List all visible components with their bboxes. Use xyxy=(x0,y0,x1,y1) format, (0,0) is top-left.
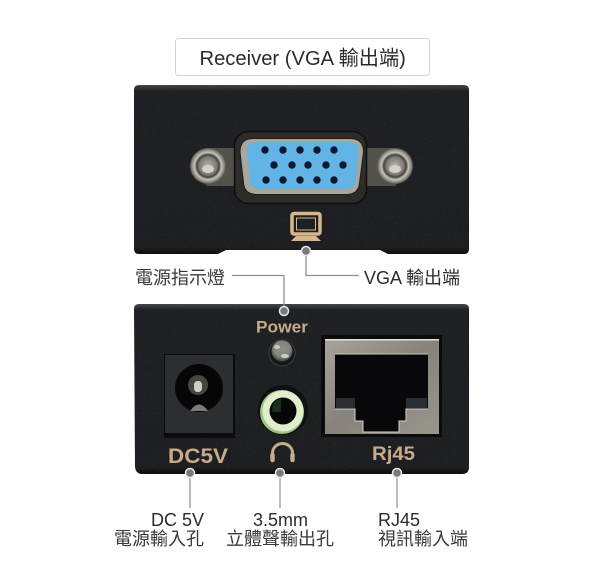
RJ45 label: 視訊輸入端 xyxy=(378,529,468,549)
Rj45 label: Rj45 xyxy=(372,444,415,465)
icon: headphones xyxy=(272,444,292,460)
power indicator label: 電源指示燈 xyxy=(135,268,225,288)
DC power jack xyxy=(164,354,235,438)
3.5mm audio jack xyxy=(258,385,308,435)
right screw xyxy=(377,148,413,184)
power LED xyxy=(269,340,295,366)
title box xyxy=(176,38,430,76)
panel: VGA receiver device photo xyxy=(134,85,469,254)
left screw xyxy=(190,148,226,184)
3.5mm label xyxy=(226,510,334,549)
DC 5V label: 電源輸入孔 xyxy=(114,529,204,549)
DC5V label: DC5V xyxy=(168,444,229,468)
title box: Receiver (VGA 輸出端) xyxy=(200,47,406,70)
3.5mm label: 立體聲輸出孔 xyxy=(226,529,334,549)
RJ45 label: RJ45 xyxy=(378,510,420,530)
RJ45 label xyxy=(378,510,468,549)
callout: DC leader xyxy=(186,468,194,508)
callout: VGA output leader xyxy=(302,246,359,276)
VGA connector xyxy=(205,132,397,204)
DC 5V label xyxy=(114,510,204,549)
DC 5V label: DC 5V xyxy=(151,510,204,530)
callout: audio leader xyxy=(276,468,284,508)
callout: RJ45 leader xyxy=(392,468,402,508)
icon: monitor xyxy=(291,214,321,241)
panel: bottom device photo xyxy=(134,304,469,474)
callout: power indicator leader xyxy=(232,276,288,316)
Power label: Power xyxy=(256,318,309,336)
RJ45 jack xyxy=(321,335,442,437)
VGA output label: VGA 輸出端 xyxy=(364,268,460,288)
3.5mm label: 3.5mm xyxy=(253,510,308,530)
